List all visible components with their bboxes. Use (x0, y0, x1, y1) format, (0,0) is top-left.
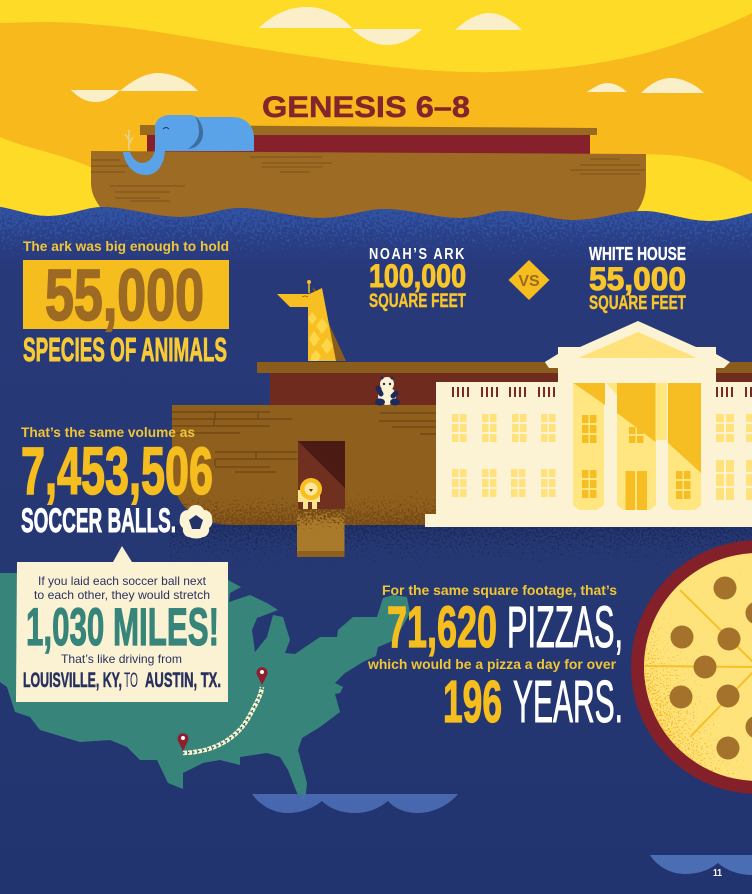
comparison: White House: SQUARE FEET (589, 292, 686, 314)
callout: 1,030 miles: LOUISVILLE, KY, (23, 669, 122, 692)
large ark (172, 280, 752, 557)
stat: 55,000 species: SPECIES OF ANIMALS (23, 331, 227, 368)
portico and pediment (545, 321, 731, 510)
icon: elephant (123, 115, 254, 175)
heading: Genesis 6-8: GENESIS 6–8 (262, 91, 470, 124)
stat: soccer balls (21, 425, 213, 540)
small ark with elephant (91, 115, 646, 224)
stat: 55,000 species: 55,000 (45, 256, 204, 336)
stat: pizzas: PIZZAS, (507, 595, 623, 660)
ark roof (257, 362, 752, 373)
comparison: Noah's Ark: SQUARE FEET (369, 290, 466, 312)
VS diamond: VS (518, 273, 540, 290)
stat: pizzas: 196 (443, 669, 502, 735)
comparison: Noah's Ark (369, 246, 466, 312)
stat: 55,000 species: The ark was big enough to hold (23, 239, 229, 254)
icon: Louisville pin (256, 667, 268, 685)
comparison: White House: WHITE HOUSE (589, 244, 686, 264)
map of the United States with route (0, 573, 410, 802)
ark hull (91, 151, 646, 224)
comparison: Noah's Ark: 100,000 (369, 258, 466, 294)
map shape (0, 573, 410, 802)
water and navy background (0, 200, 752, 894)
ark hull (172, 405, 440, 525)
callout: 1,030 miles: AUSTIN, TX. (145, 669, 221, 692)
pepperoni (670, 576, 752, 760)
callout: 1,030 miles: TO (124, 669, 138, 692)
VS diamond (508, 260, 550, 300)
stat: 55,000 species (23, 239, 229, 368)
crust (631, 540, 752, 794)
route of soccer balls (183, 687, 262, 753)
callout: 1,030 miles: 1,030 MILES! (26, 598, 219, 657)
icon: soccer ball (180, 505, 212, 538)
icon: giraffe (277, 280, 346, 361)
callout: 1,030 miles: If you laid each soccer ball next (38, 574, 207, 588)
stat: soccer balls: 7,453,506 (21, 434, 213, 509)
page number: 11 (713, 868, 722, 879)
ramp (297, 509, 344, 557)
stat: pizzas: 71,620 (387, 595, 497, 660)
stat: pizzas: For the same square footage, that’s (382, 583, 617, 598)
icon: lion (298, 478, 322, 509)
attic windows (452, 387, 752, 397)
windows (452, 414, 752, 500)
comparison: Noah's Ark: NOAH’S ARK (369, 246, 466, 263)
ark cabin (147, 135, 590, 155)
main building (436, 382, 752, 527)
callout: 1,030 miles (16, 546, 228, 702)
comparison: White House (589, 244, 686, 314)
cheese (644, 553, 752, 781)
icon: Austin pin (178, 733, 188, 751)
pizza (631, 540, 752, 794)
icon: panda (375, 376, 400, 406)
callout: 1,030 miles: That’s like driving from (61, 652, 182, 666)
number box (23, 260, 229, 329)
callout: 1,030 miles: to each other, they would stretch (34, 588, 210, 602)
stat: soccer balls: SOCCER BALLS. (21, 502, 176, 540)
columns (573, 383, 701, 510)
stat: soccer balls: That’s the same volume as (21, 425, 195, 440)
stat: pizzas: YEARS. (513, 669, 623, 735)
clouds (71, 7, 704, 102)
ark roof (140, 125, 597, 135)
ark door (298, 441, 345, 509)
sky background (0, 0, 752, 240)
lower waves (252, 794, 752, 875)
comparison: White House: 55,000 (589, 261, 686, 297)
stat: pizzas (367, 583, 623, 735)
White House (425, 321, 752, 527)
stat: pizzas: which would be a pizza a day for over (367, 657, 617, 672)
ark cabin (270, 373, 752, 406)
